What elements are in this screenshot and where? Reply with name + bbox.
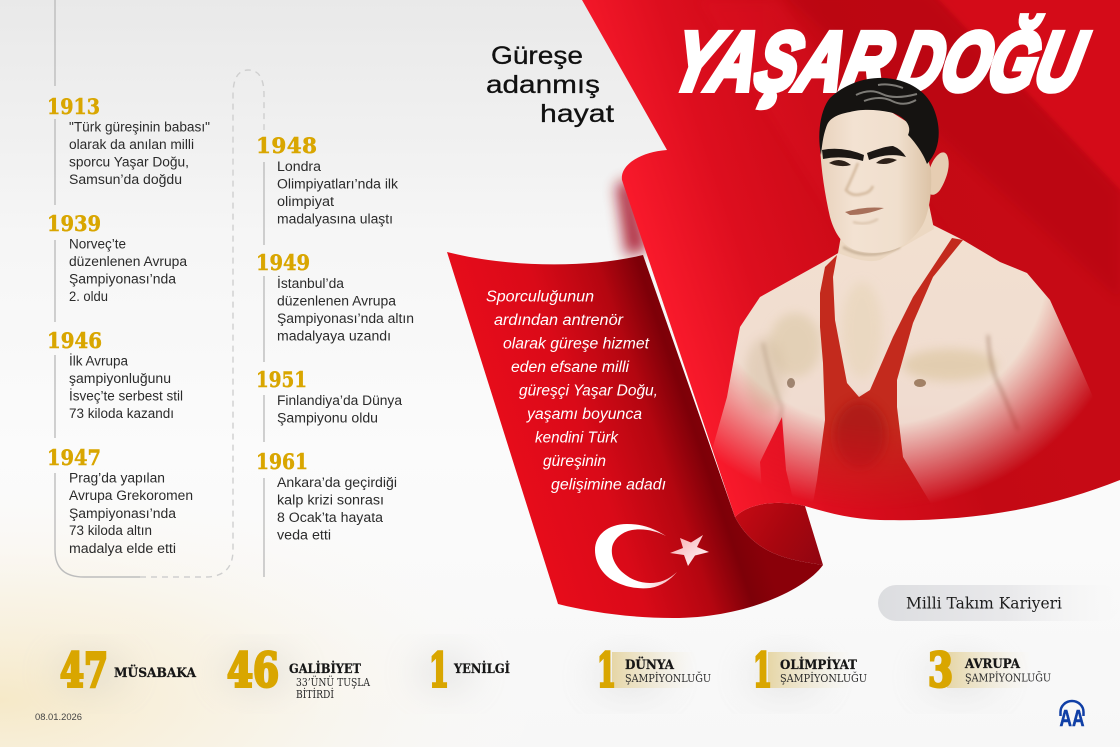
timeline: 1939: 2. oldu bbox=[69, 289, 108, 304]
timeline: 1947: madalya elde etti bbox=[69, 541, 176, 556]
stat: 46 wins: 33’ÜNÜ TUŞLA bbox=[296, 675, 371, 689]
flag text: ardından antrenör bbox=[494, 312, 624, 329]
stat: olympic championship: 1 bbox=[753, 644, 772, 698]
timeline: 1939 bbox=[47, 212, 188, 304]
torso bbox=[712, 225, 1092, 500]
timeline: 1949: 1949 bbox=[256, 251, 310, 276]
stat: 46 wins bbox=[227, 644, 371, 701]
timeline: 1949: madalyaya uzandı bbox=[277, 328, 391, 344]
timeline: 1961: 8 Ocak’ta hayata bbox=[277, 510, 384, 525]
stat: 47 matches: MÜSABAKA bbox=[114, 664, 197, 681]
timeline: 1948: 1948 bbox=[256, 134, 317, 159]
timeline: 1939: 1939 bbox=[47, 212, 101, 237]
stat: olympic championship bbox=[753, 644, 867, 698]
timeline: 1951: 1951 bbox=[256, 368, 307, 393]
timeline: 1939: Norveç’te bbox=[69, 236, 126, 252]
timeline: 1951: Finlandiya’da Dünya bbox=[277, 393, 403, 408]
timeline: 1946: 1946 bbox=[47, 329, 102, 354]
stat: world championship: 1 bbox=[597, 644, 616, 698]
stat shadows bbox=[52, 654, 998, 694]
timeline: 1947: Avrupa Grekoromen bbox=[69, 488, 193, 503]
icon: AA logo: AA bbox=[1060, 705, 1084, 731]
timeline: 1947: Prag’da yapılan bbox=[69, 471, 165, 486]
timeline: 1946 bbox=[47, 329, 183, 421]
stat: 1 loss bbox=[429, 644, 510, 698]
flag text: kendini Türk bbox=[535, 430, 619, 446]
timeline: 1913: Samsun’da doğdu bbox=[69, 172, 182, 187]
stat: european championship: ŞAMPİYONLUĞU bbox=[965, 670, 1051, 684]
eyes bbox=[829, 158, 897, 166]
stat: 46 wins: BİTİRDİ bbox=[296, 687, 334, 701]
timeline: 1947: 1947 bbox=[47, 446, 101, 471]
lower flag bbox=[447, 252, 823, 618]
subtitle: adanmış bbox=[486, 71, 600, 99]
flag text: güreşinin bbox=[543, 453, 606, 470]
hair bbox=[819, 78, 939, 164]
timeline: 1946: 73 kiloda kazandı bbox=[69, 406, 174, 421]
timeline: 1946: İlk Avrupa bbox=[69, 354, 129, 368]
timeline: 1913: 1913 bbox=[47, 95, 100, 120]
timeline: 1913: "Türk güreşinin babası" bbox=[69, 120, 210, 134]
timeline: 1961: kalp krizi sonrası bbox=[277, 492, 384, 508]
ear bbox=[930, 152, 949, 195]
timeline: 1946: İsveç’te serbest stil bbox=[69, 388, 183, 404]
flag text: Sporculuğunun bbox=[486, 289, 594, 306]
timeline connector lines bbox=[55, 0, 264, 577]
stat: world championship bbox=[597, 644, 711, 698]
flag text: güreşçi Yaşar Doğu, bbox=[519, 382, 658, 400]
stat: world championship: DÜNYA bbox=[625, 656, 675, 673]
timeline: 1946: şampiyonluğunu bbox=[69, 371, 171, 386]
stat: olympic championship: ŞAMPİYONLUĞU bbox=[780, 671, 867, 685]
stat: olympic championship: OLİMPİYAT bbox=[780, 657, 857, 673]
date: 08.01.2026 bbox=[35, 712, 82, 723]
flag text: eden efsane milli bbox=[511, 359, 630, 376]
timeline: 1948: Londra bbox=[277, 159, 322, 174]
pill: career heading bbox=[878, 585, 1120, 621]
flag text: gelişimine adadı bbox=[551, 476, 666, 494]
face bbox=[820, 105, 931, 253]
singlet bbox=[810, 238, 963, 520]
subtitle: Güreşe bbox=[491, 42, 583, 70]
timeline: 1913: olarak da anılan milli bbox=[69, 137, 194, 152]
timeline: 1948: olimpiyat bbox=[277, 194, 334, 209]
timeline: 1949: Şampiyonası’nda altın bbox=[277, 311, 414, 326]
flag curl bbox=[735, 503, 823, 565]
flag text bbox=[486, 289, 666, 494]
portrait bbox=[712, 78, 1092, 500]
timeline: 1961: veda etti bbox=[277, 528, 331, 542]
timeline: 1913: sporcu Yaşar Doğu, bbox=[69, 154, 189, 170]
nose bbox=[846, 163, 873, 195]
timeline: 1949: düzenlenen Avrupa bbox=[277, 294, 397, 308]
icon: AA logo bbox=[1060, 701, 1084, 731]
flag text: yaşamı boyunca bbox=[526, 406, 642, 423]
timeline: 1949 bbox=[256, 251, 414, 344]
timeline: 1947: Şampiyonası’nda bbox=[69, 506, 177, 521]
timeline: 1961: 1961 bbox=[256, 450, 308, 475]
stat: world championship: ŞAMPİYONLUĞU bbox=[625, 671, 711, 685]
timeline: 1948: madalyasına ulaştı bbox=[277, 212, 393, 226]
stat: european championship: AVRUPA bbox=[964, 657, 1021, 672]
timeline: 1913 bbox=[47, 95, 210, 187]
stat: 47 matches: 47 bbox=[60, 644, 108, 698]
eyebrows bbox=[822, 146, 906, 161]
pill: career heading: Milli Takım Kariyeri bbox=[906, 594, 1062, 612]
subtitle bbox=[486, 42, 614, 128]
timeline: 1961: Ankara’da geçirdiği bbox=[277, 475, 397, 490]
upper flag bbox=[582, 0, 1120, 520]
stat: 1 loss: 1 bbox=[429, 644, 449, 698]
title: YAŞAR bbox=[665, 15, 902, 108]
timeline: 1939: düzenlenen Avrupa bbox=[69, 254, 188, 269]
timeline: 1961 bbox=[256, 450, 397, 542]
timeline: 1948 bbox=[256, 134, 398, 226]
stat: 1 loss: YENİLGİ bbox=[453, 661, 510, 677]
stat: european championship bbox=[928, 644, 1051, 698]
timeline: 1951 bbox=[256, 368, 403, 426]
stat: european championship: 3 bbox=[928, 644, 953, 698]
timeline: 1949: İstanbul’da bbox=[277, 276, 345, 291]
flag text: olarak güreşe hizmet bbox=[503, 336, 650, 352]
stat: 46 wins: 46 bbox=[227, 644, 279, 698]
stat: 47 matches bbox=[60, 644, 197, 698]
nipples bbox=[914, 379, 926, 387]
subtitle: hayat bbox=[540, 100, 614, 128]
timeline: 1939: Şampiyonası’nda bbox=[69, 272, 177, 286]
timeline: 1947: 73 kiloda altın bbox=[69, 523, 152, 538]
stat: 46 wins: GALİBİYET bbox=[289, 661, 361, 677]
mouth bbox=[845, 208, 884, 215]
timeline: 1951: Şampiyonu oldu bbox=[277, 410, 378, 426]
icon: crescent and star bbox=[595, 524, 709, 588]
neck bbox=[838, 200, 934, 261]
flag shadow bbox=[616, 178, 648, 256]
timeline: 1948: Olimpiyatları’nda ilk bbox=[277, 176, 398, 192]
arm gap bbox=[760, 417, 791, 492]
timeline: 1947 bbox=[47, 446, 193, 556]
